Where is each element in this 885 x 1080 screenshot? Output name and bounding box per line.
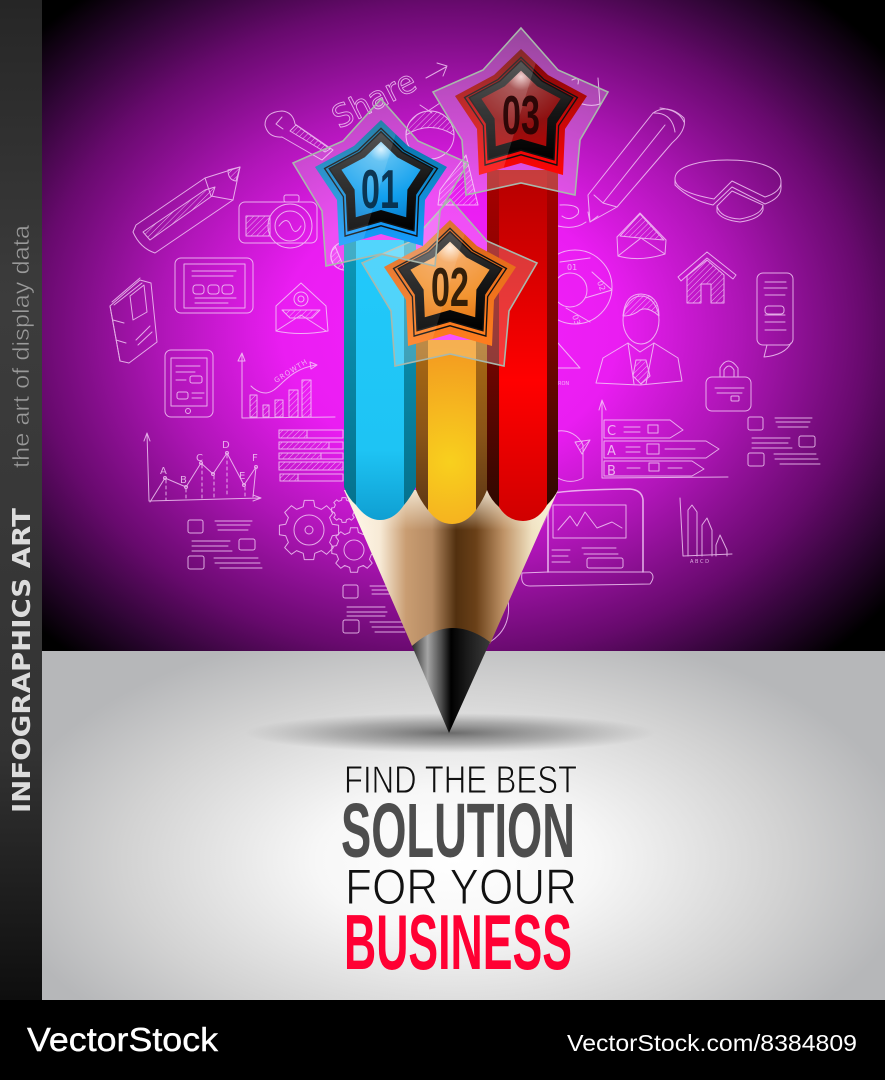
left sidebar: [0, 0, 42, 1000]
badge number 03: 03: [502, 85, 540, 146]
doodle: circular arrow: [558, 431, 590, 481]
doodle: growth chart: GROWTH: [273, 358, 310, 385]
purple background panel: [42, 0, 885, 651]
doodle: gears: [279, 498, 376, 572]
doodle: arrow bar chart: [599, 400, 728, 479]
star badge 03 red: [433, 28, 608, 195]
doodle: donut diagram: 02: [595, 280, 607, 292]
pencil: [344, 170, 558, 733]
doodle: small hatched shapes: [331, 155, 478, 270]
headline line 3: FOR YOUR: [345, 859, 577, 915]
doodle: camera: [239, 195, 317, 248]
doodle: line chart A to F: E: [239, 471, 245, 482]
doodle: growth chart: [238, 353, 335, 418]
doodle: round globe: [406, 103, 454, 159]
doodle: donut diagram: 03: [570, 314, 582, 326]
doodle: text list right: [748, 417, 820, 466]
doodle: horizontal bars: [279, 430, 343, 481]
bottom black credit band: [0, 1000, 885, 1080]
doodle: ruler triangle: RON: [558, 381, 569, 387]
doodle: envelope right: [617, 213, 666, 259]
doodle: pencil left: [133, 167, 240, 253]
blue column: [344, 240, 416, 520]
doodle: ruler triangle: [558, 343, 580, 387]
doodle: arrow bar chart: C: [607, 424, 616, 439]
sidebar tagline: the art of display data: [8, 225, 34, 468]
doodle: tablet: [175, 258, 253, 313]
doodle: phone: [165, 350, 213, 417]
doodle: pencil right: [588, 108, 684, 222]
doodle: line chart A to F: D: [222, 440, 230, 451]
pencil wood highlight under colours: [344, 490, 558, 530]
doodle: arrow bar chart: B: [607, 464, 616, 479]
pencil lead tip: [412, 628, 490, 733]
doodle: line chart A to F: F: [252, 453, 258, 464]
headline line 4: BUSINESS: [344, 898, 572, 986]
pencil ground shadow: [245, 713, 655, 753]
headline line 1: FIND THE BEST: [344, 759, 577, 802]
doodle: line chart A to F: B: [180, 475, 187, 486]
doodle: book: [110, 278, 157, 363]
doodle: line chart A to F: [144, 433, 261, 502]
doodle: swirl at right: [558, 78, 600, 227]
doodle: donut diagram: [538, 250, 612, 326]
red column: [487, 170, 558, 521]
star badge 01 blue: [293, 99, 468, 266]
doodle: text list lower left: [188, 520, 262, 569]
credit url: VectorStock.com/8384809: [567, 1030, 857, 1056]
doodle: mini arrow chart: [680, 498, 732, 565]
orange column: [416, 340, 487, 524]
doodle: mini arrow chart: A B C D: [690, 559, 709, 565]
doodle: arrow bar chart: A: [607, 444, 616, 459]
headline text block: [341, 759, 577, 986]
doodle: donut diagram: 01: [567, 263, 577, 272]
doodle: pie chart: [675, 160, 781, 222]
doodle: wrench: [265, 111, 333, 160]
doodle: house: [678, 252, 736, 303]
doodle: padlock: [706, 361, 751, 411]
doodle: speech phone: [757, 273, 793, 357]
badge number 01: 01: [361, 159, 399, 220]
sketch doodles background: [110, 63, 820, 642]
doodle: laptop: [522, 489, 653, 586]
pencil wood cone: [344, 490, 558, 646]
doodle: line chart A to F: C: [196, 453, 203, 464]
doodle: email envelope: [276, 283, 328, 334]
doodle: share word with arrow: Share: [326, 63, 422, 136]
sidebar brand name: INFOGRAPHICS ART: [7, 508, 36, 813]
grey floor panel: [42, 651, 885, 1000]
doodle: business person: [596, 294, 682, 385]
star badge 02 orange: [362, 199, 537, 366]
headline line 2: SOLUTION: [341, 788, 575, 874]
doodle: globe under pencil: [490, 600, 509, 642]
doodle: text list under pencil: [343, 585, 405, 633]
doodle: line chart A to F: A: [160, 466, 167, 477]
credit logo: VectorStock: [27, 1021, 219, 1058]
badge number 02: 02: [431, 257, 469, 318]
